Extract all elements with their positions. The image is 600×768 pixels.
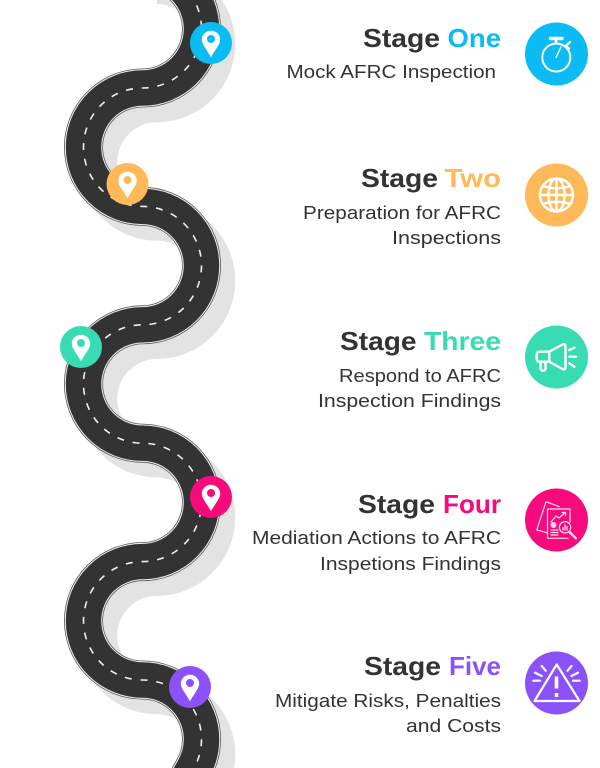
icon: globe [525,164,588,226]
stage one text: One [448,23,501,53]
stage two text: Stage [361,163,438,193]
pin: stage two [106,163,148,205]
stage three text: Stage [340,326,416,356]
stage three text: Inspection Findings [318,391,501,411]
stage five text: Five [449,651,501,681]
stage two text [303,163,501,248]
stage five text [275,651,501,736]
pin: stage four [190,476,232,518]
stage three text [318,326,501,411]
pin: stage three [60,326,102,368]
pin: stage five [169,666,211,708]
stage one text: Mock AFRC Inspection [286,62,496,82]
stage three text: Three [424,326,501,356]
stage five text: and Costs [406,716,501,736]
stage one text [286,23,501,82]
stage three text: Respond to AFRC [339,366,501,386]
icon: warning triangle [525,652,588,714]
stage four text: Mediation Actions to AFRC [252,528,501,548]
stage four text: Four [443,489,501,519]
stage one text: Stage [363,23,440,53]
stage two text: Preparation for AFRC [303,203,501,223]
stage four text [252,489,501,574]
stage four text: Inspetions Findings [320,554,501,574]
stage five text: Mitigate Risks, Penalties [275,691,501,711]
pin: stage one [190,22,232,64]
stage two text: Two [444,163,501,193]
icon: stopwatch [525,22,588,86]
icon: megaphone [525,326,588,388]
stage two text: Inspections [392,228,501,248]
winding road [84,0,216,768]
icon: report with magnifier [525,488,588,552]
stage four text: Stage [358,489,435,519]
stage five text: Stage [364,651,441,681]
